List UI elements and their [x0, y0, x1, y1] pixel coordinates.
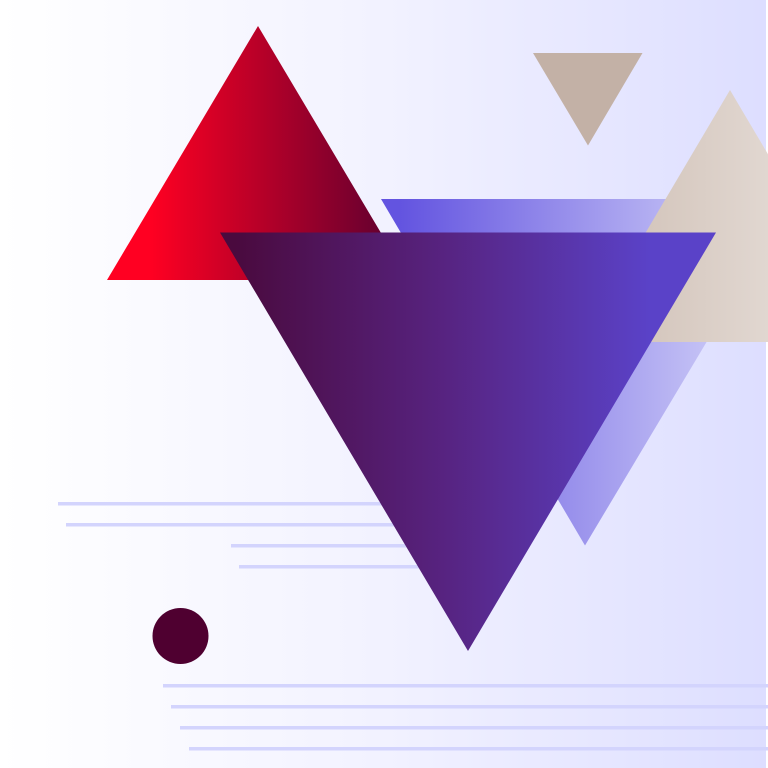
triangle: small taupe: [533, 53, 642, 146]
triangle: beige: [581, 90, 768, 342]
lines: bottom group: [163, 684, 768, 750]
triangle: large purple: [220, 232, 716, 651]
lines: middle group: [58, 502, 466, 568]
triangle: translucent blue: [381, 199, 768, 546]
triangle: red: [107, 26, 409, 280]
circle: dark maroon dot: [152, 608, 208, 664]
